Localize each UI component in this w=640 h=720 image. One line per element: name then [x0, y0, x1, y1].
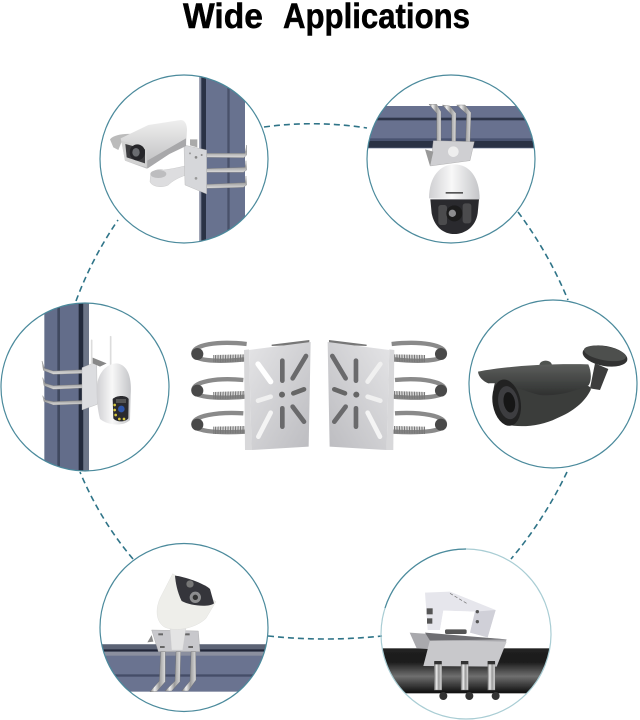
- mount plate: [152, 630, 200, 652]
- panel: dome camera under horizontal beam: [355, 75, 545, 243]
- camera body: [493, 378, 591, 426]
- center product: bracket pair: [191, 340, 447, 450]
- steel straps: [429, 104, 471, 142]
- mount plate: [430, 141, 474, 166]
- beam: [90, 644, 280, 692]
- white housing: [425, 592, 496, 637]
- lens: [492, 380, 521, 426]
- arm: [150, 160, 207, 187]
- ring clamps: [193, 343, 247, 432]
- panel: wall camera on vertical pole: [100, 70, 268, 260]
- pole: [44, 304, 89, 470]
- LEDs: [113, 404, 125, 420]
- neck: [170, 628, 186, 650]
- slots: [258, 356, 306, 437]
- title: [183, 0, 470, 36]
- dome camera: [429, 164, 480, 199]
- steel straps: [42, 361, 83, 405]
- mount plate: [82, 362, 97, 410]
- panel: bullet camera: [469, 300, 637, 468]
- right bracket: [328, 340, 447, 450]
- pole: [199, 70, 245, 260]
- dashed connector ring: [76, 124, 568, 639]
- pipe: [382, 648, 550, 694]
- camera housing: [110, 134, 132, 150]
- antennas: [92, 337, 111, 367]
- steel straps: [150, 652, 196, 692]
- hood: [478, 364, 591, 395]
- steel straps: [207, 145, 247, 188]
- cube camera: [157, 574, 216, 629]
- panel: cube camera on horizontal beam: [90, 544, 280, 712]
- plate: [249, 342, 311, 450]
- mount plate: [184, 145, 207, 194]
- panel: bracket housing on black pipe: [375, 549, 565, 719]
- steel straps: [434, 662, 495, 690]
- panel: speed dome wifi camera on vertical pole: [1, 295, 169, 485]
- beam: [355, 106, 545, 148]
- base plate: [410, 632, 506, 649]
- wall mount: [582, 345, 628, 367]
- left bracket: [191, 340, 311, 450]
- dome camera: [97, 363, 131, 425]
